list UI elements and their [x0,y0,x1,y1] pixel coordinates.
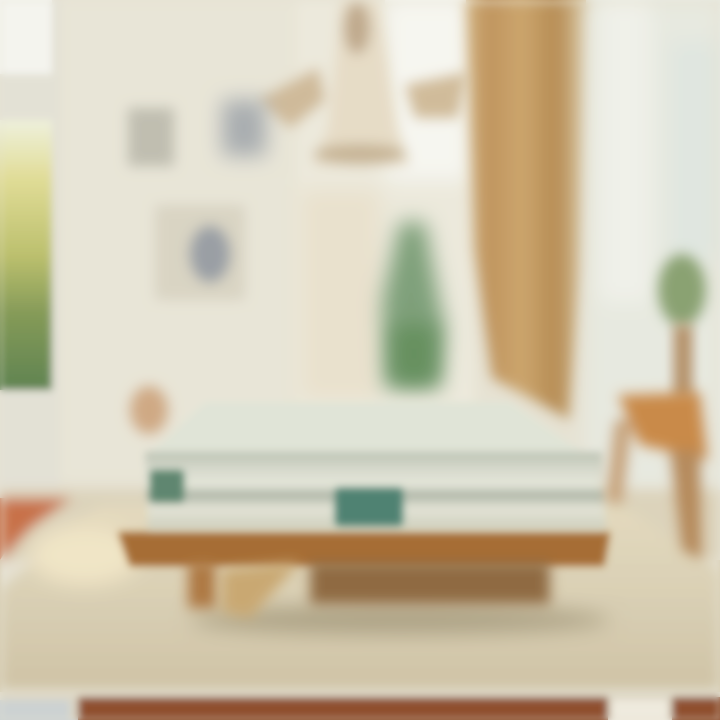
center window with plant [295,0,475,410]
right window [585,0,720,490]
mattress corner tag [150,470,184,502]
mattress label [335,488,403,526]
left window [0,0,60,490]
side table stand [674,325,692,400]
picture detail [190,226,230,282]
chair [606,392,708,560]
mattress top [145,402,590,458]
picture: lower [155,205,245,300]
picture: upper middle [222,100,266,156]
curtain [466,0,590,420]
rug highlight [30,525,140,585]
side plant [658,254,706,326]
mattress side [145,452,606,530]
bed frame [118,532,610,618]
picture: upper left [128,108,174,166]
plant in window [382,222,445,388]
pendant lamp [258,0,468,165]
small stool by wall [130,386,168,434]
bed shadow [190,606,610,634]
wall pictures [128,100,266,300]
mattress [145,402,606,530]
floor band [0,490,720,562]
floor strip bottom [0,692,720,720]
rug [0,505,720,690]
